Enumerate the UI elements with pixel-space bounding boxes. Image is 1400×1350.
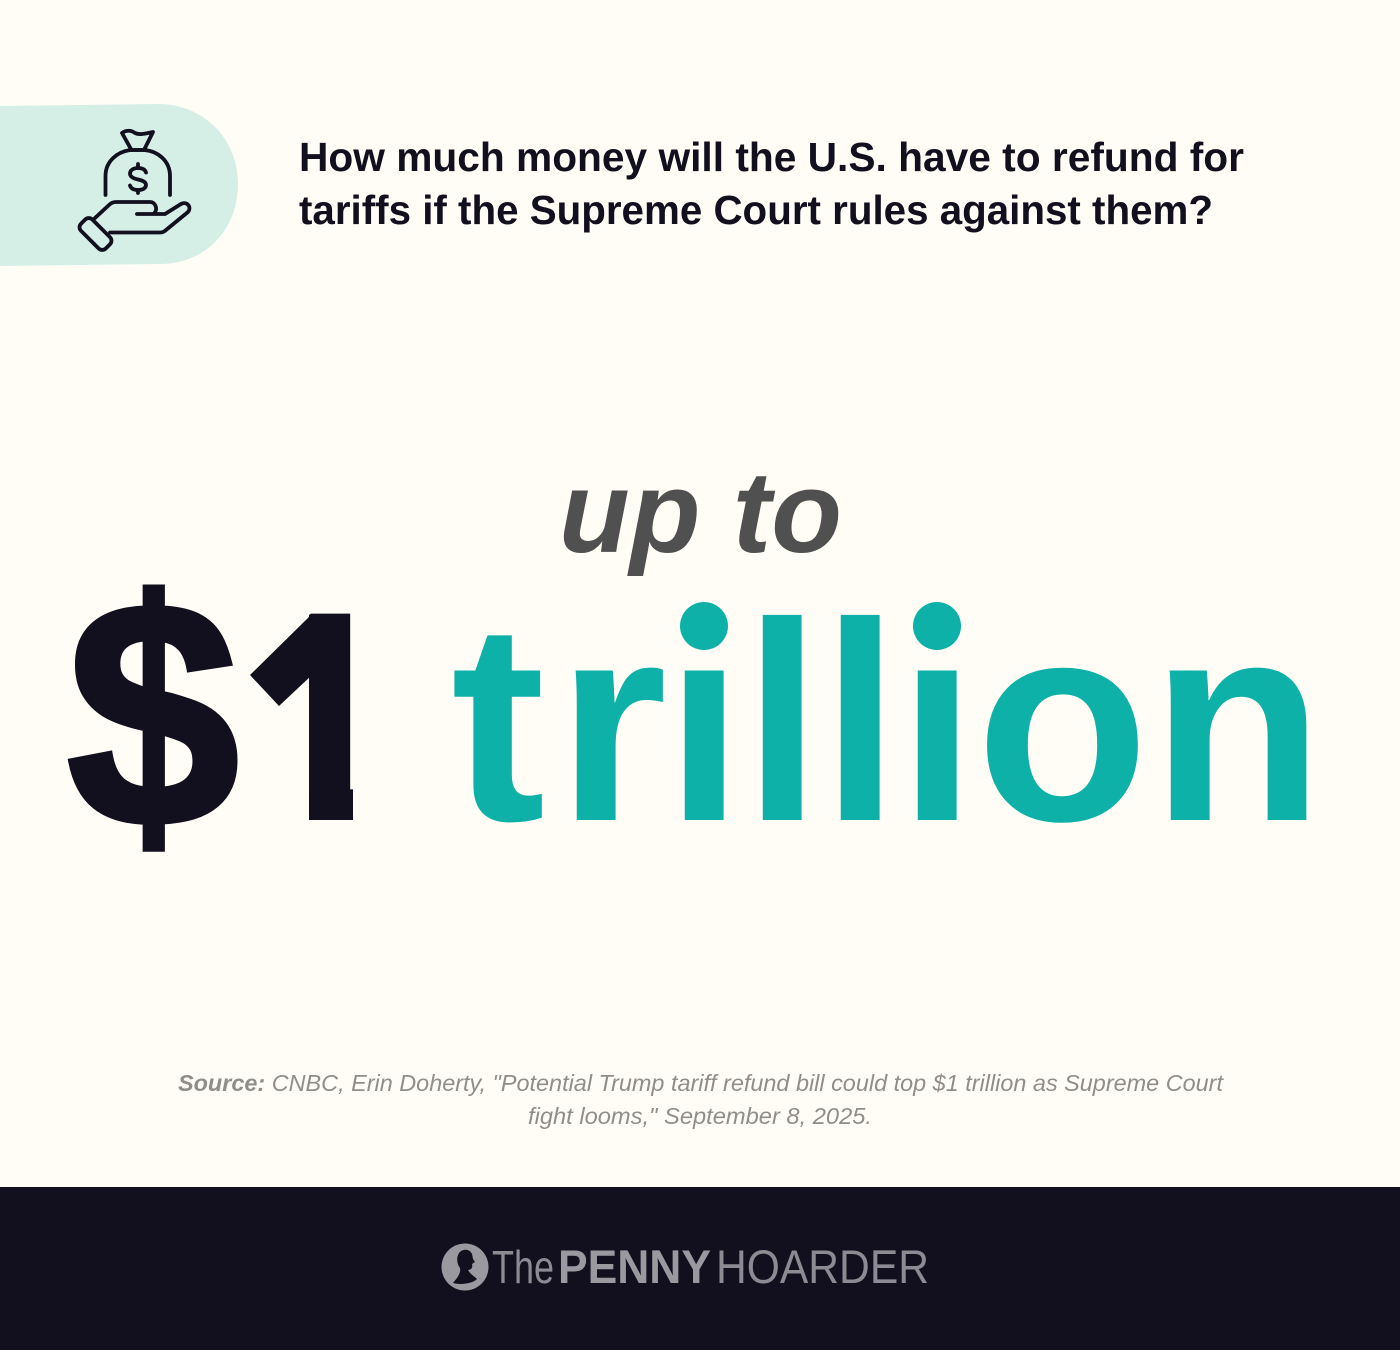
big number: $1: $ — [67, 535, 239, 893]
heading: tariffs if the Supreme Court rules against them? — [299, 187, 1213, 233]
source note: fight looms," September 8, 2025. — [528, 1103, 872, 1129]
big word: trillion: trillion — [451, 564, 1324, 880]
logo word: HOARDER: HOARDER — [716, 1240, 929, 1293]
panel: icon tab — [0, 104, 238, 266]
logo word: PENNY: PENNY — [558, 1240, 711, 1293]
big number: $1: 1 — [239, 548, 406, 884]
heading: How much money will the U.S. have to refund for — [299, 134, 1244, 180]
logo: The Penny Hoarder — [442, 1240, 929, 1293]
icon: money bag in open hand — [77, 131, 189, 252]
icon: penny portrait — [442, 1244, 488, 1290]
text: up to: up to — [559, 447, 842, 577]
big number: $1 — [68, 584, 353, 852]
source note: Source: CNBC, Erin Doherty, "Potential Trump tariff refund bill could top $1 trillion as Supreme Court — [178, 1070, 1206, 1096]
big word: trillion — [454, 602, 1306, 823]
footer band — [0, 1187, 1400, 1350]
logo word: The: The — [492, 1241, 554, 1293]
